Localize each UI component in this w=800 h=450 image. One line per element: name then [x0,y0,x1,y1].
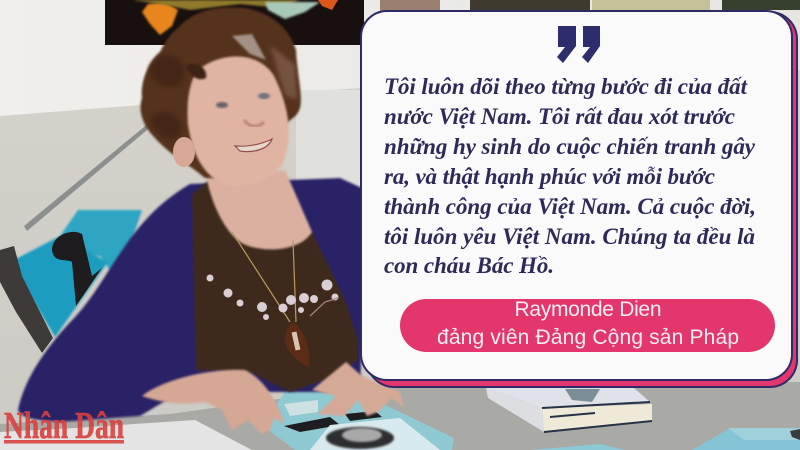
quote text: ra, và thật hạnh phúc với mỗi bước [384,164,715,189]
quote text [384,74,756,278]
head and face [141,8,301,186]
brown blouse [192,178,358,392]
right hand [312,362,404,416]
left hand [142,370,284,434]
panel shadow: navy and pink layers [366,11,798,388]
paper on table [0,420,252,450]
quote text: tôi luôn yêu Việt Nam. Chúng ta đều là [384,224,755,249]
face [187,56,289,186]
attribution pill [400,298,775,352]
painting on the wall [105,0,364,45]
curl on forehead [186,64,206,79]
quote text: con cháu Bác Hồ. [384,253,554,278]
blue books bottom right [530,428,800,450]
white hardcover book [486,388,652,432]
logo: Nhân Dân: Nhân Dân [4,405,124,447]
neck [206,170,312,249]
other pictures behind panel [380,0,800,11]
wheelchair with blue blanket [0,210,142,353]
woman in navy cardigan [18,8,404,434]
navy cardigan [18,178,362,422]
blue book under hands [262,388,454,450]
quote text: Tôi luôn dõi theo từng bước đi của đất [384,74,748,99]
quote text: nước Việt Nam. Tôi rất đau xót trước [384,104,735,129]
ear [173,137,195,167]
necklace [232,232,309,366]
hair [141,8,301,178]
eyes [216,102,228,108]
attribution pill: đảng viên Đảng Cộng sản Pháp [437,326,739,349]
quote text: thành công của Việt Nam. Cả cuộc đời, [384,194,756,219]
panel body [361,11,792,380]
blossom embroidery [206,274,338,320]
table [0,382,800,450]
nose shadow [244,120,264,126]
attribution pill: Raymonde Dien [514,298,662,321]
mouth [235,139,272,152]
quotation mark icon [557,26,600,63]
quote text: những hy sinh do cuộc chiến tranh gây [384,134,756,159]
quote panel [361,11,798,388]
